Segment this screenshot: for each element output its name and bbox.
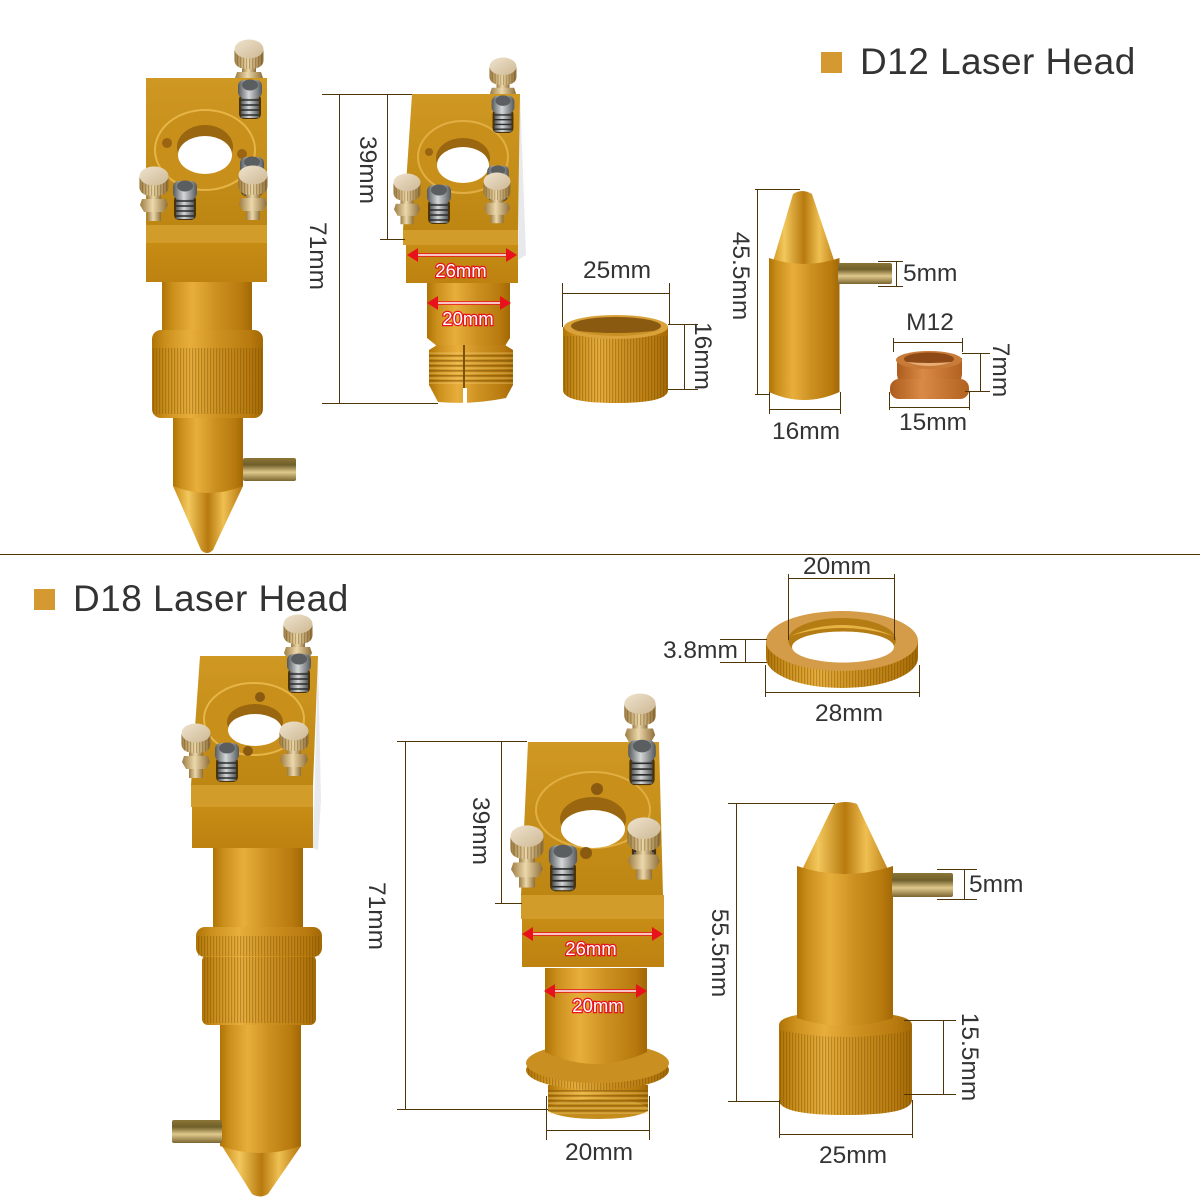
dimension: nozzle 45.5mm, 5mm, 16mm: 16mm <box>772 418 840 445</box>
photo: D12 assembled laser head <box>140 40 296 553</box>
dimension: 20mm D12: 20mm <box>442 308 494 329</box>
heading: D18 Laser Head: D18 Laser Head <box>73 578 349 619</box>
dimension: M12 7mm 15mm <box>889 309 1014 436</box>
section divider <box>0 554 1200 555</box>
dimension: 26mm D18 <box>522 927 663 959</box>
dimension: 20mm D18 <box>544 984 647 1016</box>
photo: D18 head body with dimensions <box>510 693 669 1119</box>
dimension: 71mm height D12: 71mm <box>304 222 331 290</box>
dimension: ring 20mm, 3.8mm, 28mm: 20mm <box>803 553 871 580</box>
dimension: nozzle 55.5mm, 5mm, 15.5mm, 25mm <box>706 803 1023 1169</box>
dimension: 20mm D18: 20mm <box>572 995 624 1016</box>
photo: D18 flat ring <box>766 611 918 688</box>
dimension: ring 25mm by 16mm: 16mm <box>689 322 716 390</box>
dimension: nozzle 45.5mm, 5mm, 16mm: 5mm <box>903 260 957 287</box>
dimension: 71mm height D18 <box>363 741 548 1110</box>
dimension: M12 7mm 15mm: 15mm <box>899 409 967 436</box>
dimension: 71mm height D18: 71mm <box>363 882 390 950</box>
dimension: 20mm D12 <box>427 296 511 329</box>
heading: D12 Laser Head: D12 Laser Head <box>860 41 1136 82</box>
photo: D12 head body with dimensions <box>394 58 526 405</box>
dimension: nozzle 55.5mm, 5mm, 15.5mm, 25mm: 55.5mm <box>706 909 733 997</box>
photo: D12 nozzle <box>769 191 892 400</box>
dimension: ring 20mm, 3.8mm, 28mm: 28mm <box>815 700 883 727</box>
photo: D18 assembled laser head <box>172 614 322 1196</box>
dimension: M12 7mm 15mm: M12 <box>906 309 954 336</box>
dimension: nozzle 45.5mm, 5mm, 16mm: 45.5mm <box>727 232 754 320</box>
dimension: 39mm D18 <box>467 741 522 904</box>
dimension: ring 20mm, 3.8mm, 28mm: 3.8mm <box>663 637 738 664</box>
photo: D18 nozzle <box>779 802 953 1115</box>
dimension: nozzle 55.5mm, 5mm, 15.5mm, 25mm: 15.5mm <box>956 1013 983 1101</box>
dimension: ring 20mm, 3.8mm, 28mm <box>663 553 920 727</box>
dimension: 26mm D12: 26mm <box>435 260 487 281</box>
dimension: 71mm height D12 <box>304 94 438 404</box>
dimension: 39mm D18: 39mm <box>467 797 494 865</box>
dimension: 20mm thread D18 <box>546 1096 650 1166</box>
dimension: nozzle 45.5mm, 5mm, 16mm <box>727 189 957 445</box>
dimension: nozzle 55.5mm, 5mm, 15.5mm, 25mm: 5mm <box>969 871 1023 898</box>
dimension: 39mm D12 <box>354 94 405 240</box>
dimension: 39mm D12: 39mm <box>354 136 381 204</box>
dimension: M12 7mm 15mm: 7mm <box>987 343 1014 397</box>
dimension: 20mm thread D18: 20mm <box>565 1139 633 1166</box>
dimension: ring 25mm by 16mm: 25mm <box>583 257 651 284</box>
dimension: 26mm D18: 26mm <box>565 938 617 959</box>
photo: D12 knurled ring <box>563 315 668 403</box>
dimension: ring 25mm by 16mm <box>562 257 716 390</box>
dimension: 26mm D12 <box>407 248 517 281</box>
photo: M12 copper nut <box>890 351 969 399</box>
dimension: nozzle 55.5mm, 5mm, 15.5mm, 25mm: 25mm <box>819 1142 887 1169</box>
